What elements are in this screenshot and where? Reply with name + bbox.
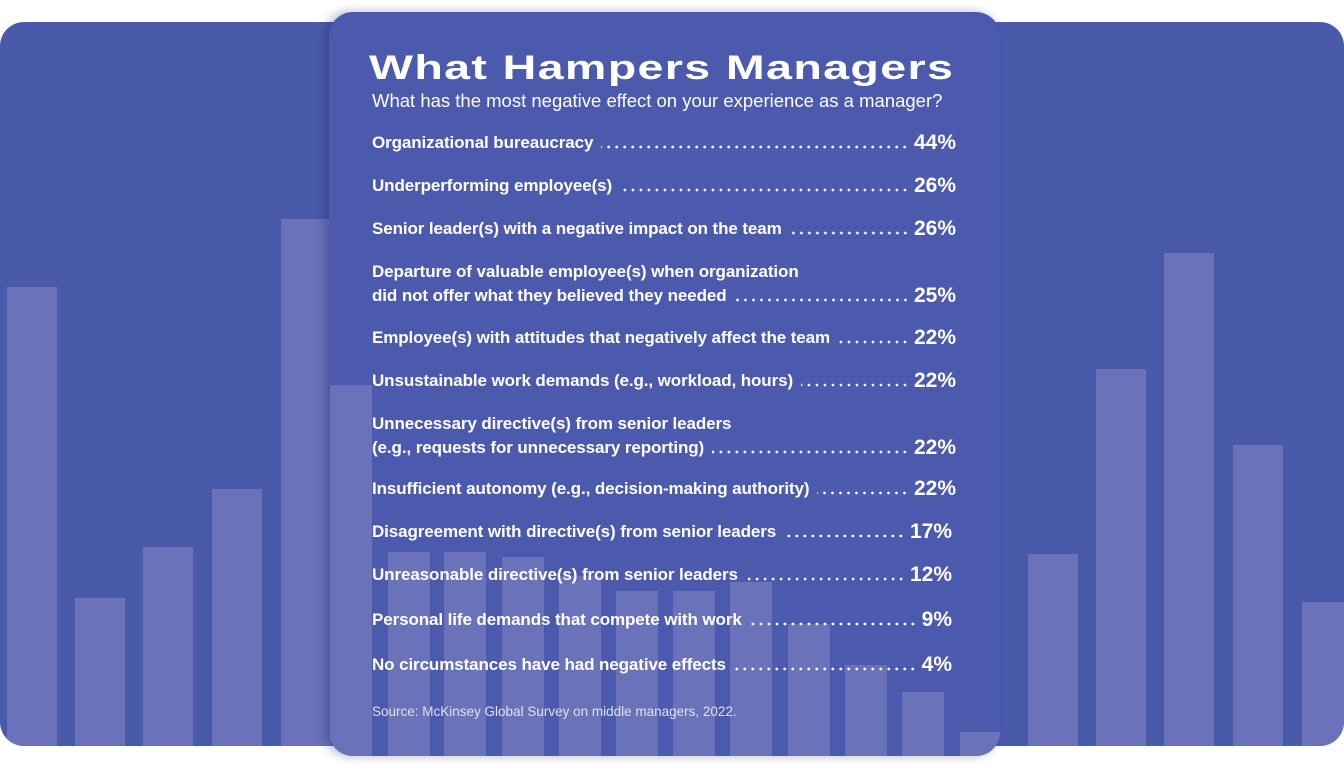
- row 7: [372, 414, 956, 459]
- row 10: [372, 563, 952, 586]
- title: What Hampers Managers: [369, 49, 954, 87]
- row 8: [372, 477, 956, 500]
- row 4: did not offer what they believed they needed: [372, 286, 727, 305]
- row 11: Personal life demands that compete with work: [372, 610, 742, 629]
- row 1: 44%: [914, 131, 956, 154]
- row 11: 9%: [922, 608, 952, 631]
- subtitle: What has the most negative effect on your experience as a manager?: [372, 90, 942, 111]
- row 1: [372, 131, 956, 154]
- row 2: [372, 174, 956, 197]
- row 12: No circumstances have had negative effects: [372, 655, 726, 674]
- row 7: Unnecessary directive(s) from senior leaders: [372, 414, 731, 433]
- row 6: Unsustainable work demands (e.g., workload, hours): [372, 371, 793, 390]
- row 12: 4%: [922, 653, 952, 676]
- row 2: Underperforming employee(s): [372, 176, 612, 195]
- main card: [329, 12, 1000, 756]
- row 11: [372, 608, 952, 631]
- row 5: Employee(s) with attitudes that negatively affect the team: [372, 328, 830, 347]
- row 4: [372, 262, 956, 307]
- row 9: Disagreement with directive(s) from senior leaders: [372, 522, 776, 541]
- row 6: 22%: [914, 369, 956, 392]
- row 10: 12%: [910, 563, 952, 586]
- row 5: [372, 326, 956, 349]
- row 8: Insufficient autonomy (e.g., decision-making authority): [372, 479, 809, 498]
- row 4: 25%: [914, 284, 956, 307]
- row 3: [372, 217, 956, 240]
- row 8: 22%: [914, 477, 956, 500]
- row 9: 17%: [910, 520, 952, 543]
- row 7: 22%: [914, 436, 956, 459]
- row 5: 22%: [914, 326, 956, 349]
- source note: Source: McKinsey Global Survey on middle managers, 2022.: [372, 704, 737, 719]
- row 10: Unreasonable directive(s) from senior leaders: [372, 565, 738, 584]
- row 12: [372, 653, 952, 676]
- row 6: [372, 369, 956, 392]
- row 1: Organizational bureaucracy: [372, 133, 593, 152]
- row 3: Senior leader(s) with a negative impact on the team: [372, 219, 782, 238]
- list rows: [372, 131, 956, 676]
- row 3: 26%: [914, 217, 956, 240]
- row 9: [372, 520, 952, 543]
- row 4: Departure of valuable employee(s) when organization: [372, 262, 799, 281]
- row 7: (e.g., requests for unnecessary reporting): [372, 438, 704, 457]
- row 2: 26%: [914, 174, 956, 197]
